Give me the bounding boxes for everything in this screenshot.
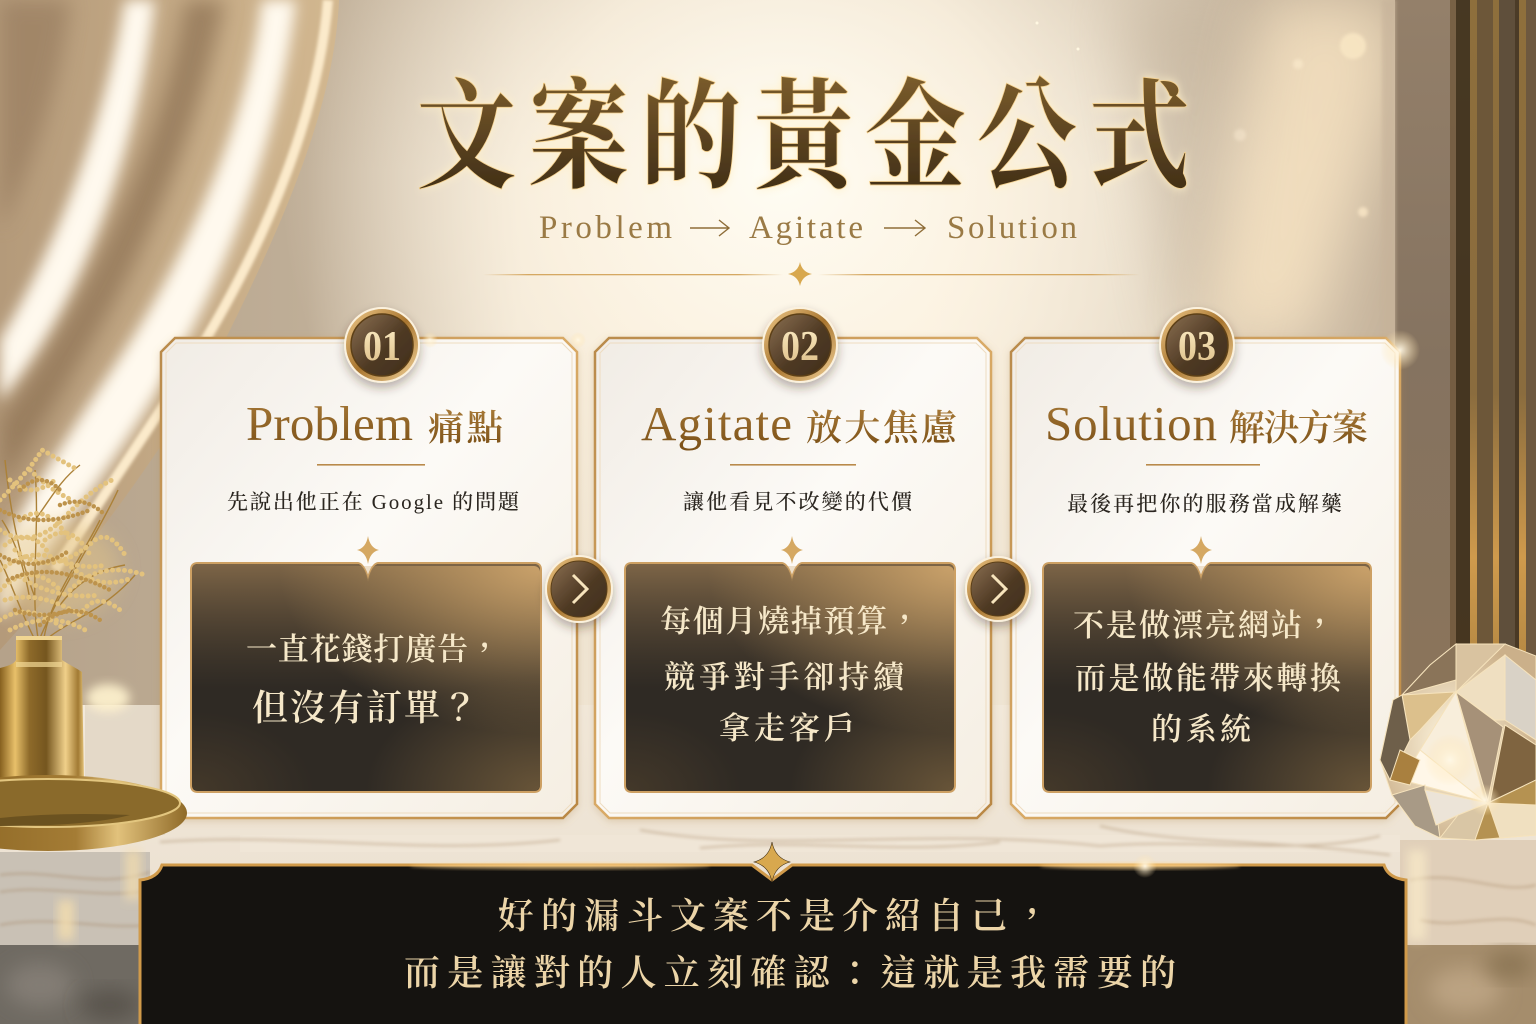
subtitle: [539, 210, 1077, 246]
heading: [1045, 396, 1368, 451]
subtitle: Solution: [947, 210, 1077, 246]
star: [357, 536, 379, 564]
description: 讓他看見不改變的代價: [683, 490, 914, 514]
dark callout: [625, 563, 955, 792]
badge 02: [762, 307, 838, 383]
dark callout: 的系統: [1151, 712, 1253, 747]
heading: Solution: [1045, 396, 1217, 451]
badge 01: [344, 307, 420, 383]
heading: 解決方案: [1229, 408, 1368, 448]
arrow button 1: [545, 555, 613, 623]
icon: gold tray: [0, 775, 187, 851]
dark callout: 拿走客戶: [719, 711, 855, 746]
panel: card 01 problem: [161, 307, 577, 818]
heading: [641, 396, 958, 451]
dark callout: [1043, 563, 1371, 792]
dark callout: 不是做漂亮網站，: [1073, 608, 1335, 643]
description: 最後再把你的服務當成解藥: [1067, 492, 1342, 516]
divider with star: [483, 262, 1140, 286]
heading: 痛點: [428, 408, 503, 448]
heading: Agitate: [641, 396, 792, 451]
heading: 放大焦慮: [806, 408, 958, 448]
title: 文案的黃金公式: [416, 72, 1190, 204]
subtitle: Problem: [539, 210, 672, 246]
right gold pillar: [1382, 0, 1536, 715]
dark callout: 每個月燒掉預算，: [660, 604, 920, 639]
badge 03: 03: [1178, 324, 1216, 370]
star: [1190, 536, 1212, 564]
subtitle: Agitate: [749, 210, 863, 246]
bottom banner: [140, 842, 1406, 1024]
icon: gold flowers: [0, 450, 145, 638]
star: [781, 536, 803, 564]
takeaway text: 好的漏斗文案不是介紹自己，: [498, 896, 1050, 936]
star: [754, 842, 790, 882]
marble counter: [0, 684, 1536, 1024]
dark callout: 但沒有訂單？: [252, 688, 478, 728]
badge 01: 01: [363, 324, 401, 370]
satin curtain: [0, 0, 345, 660]
dark callout: [191, 563, 541, 792]
heading: [246, 396, 503, 451]
dark callout: 競爭對手卻持續: [664, 660, 907, 695]
heading: Problem: [246, 396, 413, 451]
arrow: [690, 220, 729, 236]
dark callout: 一直花錢打廣告，: [246, 632, 500, 667]
panel: card 02 agitate: [595, 307, 991, 818]
panel: card 03 solution: [1011, 307, 1400, 818]
bottom banner: 而是讓對的人立刻確認：這就是我需要的: [404, 953, 1176, 993]
dark callout: 而是做能帶來轉換: [1075, 661, 1341, 696]
icon: crystal diamond: [1380, 644, 1536, 840]
badge 02: 02: [781, 324, 819, 370]
arrow button 2: [965, 556, 1031, 622]
description: 先說出他正在 Google 的問題: [227, 490, 520, 514]
icon: gold vase: [0, 636, 84, 780]
sparkles: [422, 330, 1501, 878]
badge 03: [1159, 307, 1235, 383]
